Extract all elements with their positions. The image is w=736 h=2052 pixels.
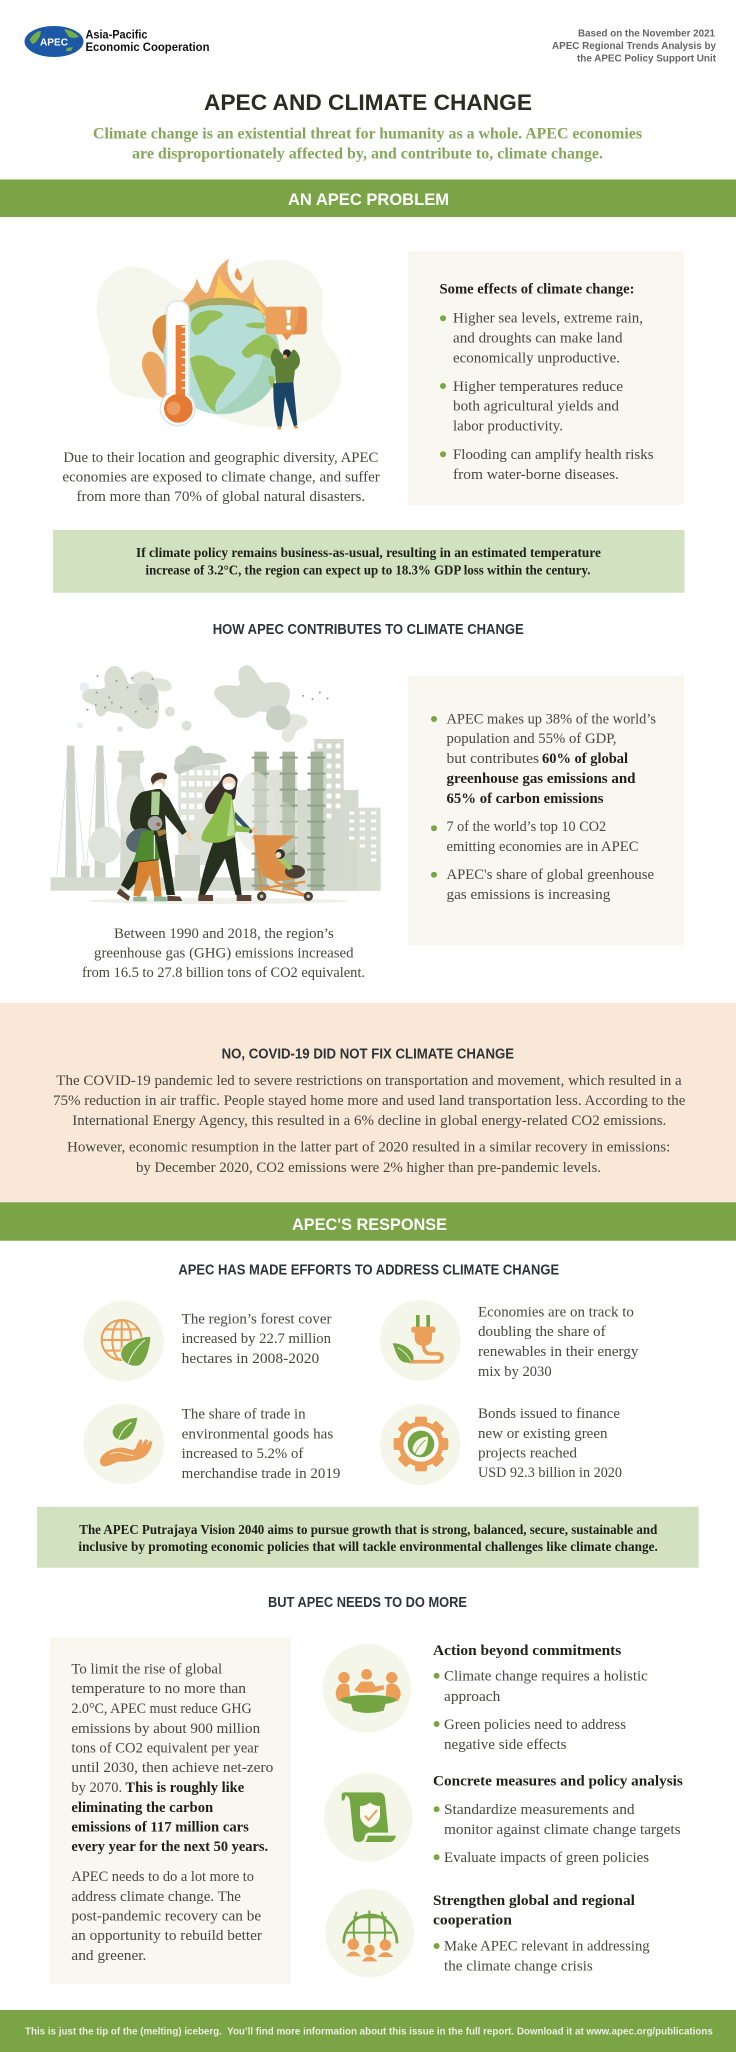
panel: emissions reduction needed: by 2070. (71, 1780, 122, 1796)
panel: effects of climate change: Some effects of climate change: (440, 282, 634, 298)
icon: globe and leaf (83, 1301, 164, 1381)
panel: emissions reduction needed: post-pandemic recovery can be (71, 1908, 261, 1924)
figure: man (117, 773, 193, 901)
heading: efforts: APEC HAS MADE EFFORTS TO ADDRESS CLIMATE CHANGE (178, 1262, 559, 1278)
text: renewables: Economies are on track to (478, 1304, 634, 1320)
stroller with baby (254, 835, 313, 901)
panel: effects of climate change: and droughts can make land (453, 330, 623, 346)
panel: COVID-19 did not fix climate change: NO, COVID-19 DID NOT FIX CLIMATE CHANGE (222, 1046, 514, 1062)
panel: emissions reduction needed: To limit the rise of global (71, 1662, 222, 1678)
panel: emissions reduction needed: every year for the next 50 years. (71, 1839, 268, 1855)
text: GHG emissions increase: greenhouse gas (GHG) emissions increased (94, 946, 354, 962)
text: forest cover: The region’s forest cover (182, 1312, 332, 1328)
subtitle: Climate change is an existential threat for humanity as a whole. APEC economies (93, 126, 642, 142)
text: strengthen cooperation: the climate change crisis (444, 1958, 593, 1974)
text: forest cover: increased by 22.7 million (182, 1331, 332, 1347)
text: green bonds (478, 1406, 622, 1481)
panel: effects of climate change: from water-borne diseases. (453, 467, 619, 483)
section band: APEC's response: APEC'S RESPONSE (292, 1215, 447, 1234)
source note (552, 28, 716, 64)
text: environmental goods: The share of trade in (182, 1406, 306, 1422)
icon: people around table (323, 1644, 411, 1733)
logo: APEC: APEC (40, 38, 68, 48)
text: concrete measures (433, 1774, 683, 1866)
icon: gear and leaf (380, 1404, 461, 1485)
panel: APEC contribution facts: but contributes (446, 751, 539, 767)
text: GHG emissions increase (82, 926, 365, 981)
footer band (0, 2010, 736, 2052)
panel: APEC contribution facts: 7 of the world’s top 10 CO2 (446, 819, 606, 835)
text: exposure to disasters: from more than 70% of global natural disasters. (76, 489, 365, 505)
title: APEC AND CLIMATE CHANGE (204, 90, 532, 115)
logo: APEC: Asia-Pacific (86, 30, 148, 42)
text: renewables: doubling the share of (478, 1324, 606, 1340)
text: strengthen cooperation: Make APEC relevant in addressing (444, 1938, 650, 1954)
logo: APEC: Economic Cooperation (86, 42, 210, 54)
icon: plug and leaf (380, 1300, 461, 1381)
text: environmental goods: environmental goods has (182, 1426, 334, 1442)
text: action beyond commitments: approach (444, 1689, 501, 1705)
text: green bonds: new or existing green (478, 1426, 608, 1442)
panel: APEC contribution facts: greenhouse gas emissions and (446, 771, 636, 787)
text: forest cover (182, 1312, 332, 1367)
panel: emissions reduction needed: 2.0°C, APEC must reduce GHG (71, 1701, 252, 1717)
callout: Putrajaya Vision 2040: inclusive by promoting economic policies that will tackle environmental challenges like climate change. (78, 1539, 658, 1554)
subtitle: are disproportionately affected by, and contribute to, climate change. (132, 146, 603, 162)
callout: GDP loss (53, 530, 684, 593)
panel: COVID-19 did not fix climate change: 75% reduction in air traffic. People stayed home more and used land transportation less. According to the (53, 1093, 685, 1109)
text: green bonds: USD 92.3 billion in 2020 (478, 1465, 622, 1481)
panel: APEC contribution facts: gas emissions is increasing (446, 887, 610, 903)
text: GHG emissions increase: Between 1990 and 2018, the region’s (114, 926, 334, 942)
section band: APEC's response (0, 1202, 736, 1241)
illustration: family walking in polluted city (51, 665, 381, 904)
text: renewables: mix by 2030 (478, 1364, 552, 1380)
panel: effects of climate change: Higher temperatures reduce (453, 379, 623, 395)
text: environmental goods (182, 1406, 340, 1482)
text: action beyond commitments (433, 1643, 648, 1753)
panel: emissions reduction needed: and greener. (71, 1948, 146, 1964)
icon: alert bubble (266, 307, 307, 340)
text: exposure to disasters: Due to their location and geographic diversity, APEC (63, 450, 378, 466)
panel: emissions reduction needed: an opportunity to rebuild better (71, 1928, 262, 1944)
source note: Based on the November 2021 (578, 28, 715, 40)
text: renewables: renewables in their energy (478, 1344, 639, 1360)
callout: Putrajaya Vision 2040 (37, 1507, 699, 1568)
panel: effects of climate change: labor productivity. (453, 418, 563, 434)
text: green bonds: projects reached (478, 1446, 578, 1462)
text: concrete measures: Standardize measurements and (444, 1802, 635, 1818)
panel: APEC contribution facts: 65% of carbon emissions (446, 791, 604, 807)
panel: emissions reduction needed: This is roughly like (125, 1780, 245, 1796)
panel: APEC contribution facts: APEC's share of global greenhouse (446, 867, 654, 883)
text: strengthen cooperation (433, 1893, 650, 1974)
text: concrete measures: monitor against climate change targets (444, 1822, 681, 1838)
panel: emissions reduction needed: eliminating the carbon (71, 1800, 213, 1816)
callout: GDP loss: If climate policy remains business-as-usual, resulting in an estimated temperature (136, 545, 601, 560)
heading: how APEC contributes: HOW APEC CONTRIBUTES TO CLIMATE CHANGE (213, 622, 524, 638)
panel: emissions reduction needed: emissions by about 900 million (71, 1721, 261, 1737)
panel: effects of climate change: Higher sea levels, extreme rain, (453, 311, 643, 327)
icon: hand and leaf (83, 1404, 164, 1484)
text: forest cover: hectares in 2008-2020 (182, 1351, 319, 1367)
panel: effects of climate change: economically unproductive. (453, 350, 620, 366)
panel: COVID-19 did not fix climate change: International Energy Agency, this resulted in a 6% decline in global energy-related CO2 emissions. (72, 1113, 666, 1129)
text: GHG emissions increase: from 16.5 to 27.8 billion tons of CO2 equivalent. (82, 965, 365, 981)
callout: GDP loss: increase of 3.2°C, the region can expect up to 18.3% GDP loss within the century. (146, 562, 590, 578)
panel: emissions reduction needed: address climate change. The (71, 1889, 241, 1905)
section band: an APEC problem: AN APEC PROBLEM (288, 190, 449, 209)
callout: Putrajaya Vision 2040: The APEC Putrajaya Vision 2040 aims to pursue growth that is strong, balanced, secure, sustainable and (79, 1522, 658, 1537)
panel: effects of climate change (408, 251, 684, 505)
panel: COVID-19 did not fix climate change: by December 2020, CO2 emissions were 2% higher than pre-pandemic levels. (136, 1160, 601, 1176)
figure: worried person (271, 348, 300, 429)
panel: emissions reduction needed: emissions of 117 million cars (71, 1820, 249, 1836)
panel: emissions reduction needed: until 2030, then achieve net-zero (71, 1760, 273, 1776)
logo: APEC (24, 26, 210, 57)
text: action beyond commitments: negative side effects (444, 1737, 567, 1753)
panel: effects of climate change: Flooding can amplify health risks (453, 447, 654, 463)
panel: APEC contribution facts: APEC makes up 38% of the world’s (446, 712, 656, 728)
panel: effects of climate change: both agricultural yields and (453, 398, 620, 414)
icon: scroll with shield (324, 1773, 413, 1862)
text: strengthen cooperation: cooperation (433, 1913, 512, 1929)
smoke clouds (77, 665, 328, 742)
figure: child with gas mask (122, 816, 167, 901)
panel: APEC contribution facts: population and 55% of GDP, (446, 731, 616, 747)
text: exposure to disasters: economies are exposed to climate change, and suffer (62, 470, 380, 486)
text: action beyond commitments: Action beyond commitments (433, 1643, 622, 1659)
panel: APEC contribution facts: 60% of global (542, 751, 628, 767)
text: exposure to disasters (62, 450, 380, 505)
illustration: burning globe with thermometer (96, 258, 341, 429)
panel: APEC contribution facts: emitting economies are in APEC (446, 839, 638, 855)
text: environmental goods: increased to 5.2% of (182, 1446, 303, 1462)
subtitle (93, 126, 642, 162)
text: concrete measures: Concrete measures and policy analysis (433, 1774, 683, 1790)
text: action beyond commitments: Climate change requires a holistic (444, 1668, 648, 1684)
icon: thermometer (160, 301, 195, 426)
text: action beyond commitments: Green policies need to address (444, 1717, 626, 1733)
section band: an APEC problem (0, 180, 736, 217)
text: environmental goods: merchandise trade in 2019 (182, 1466, 340, 1482)
panel: emissions reduction needed: APEC needs to do a lot more to (71, 1869, 254, 1885)
panel: COVID-19 did not fix climate change (0, 1003, 736, 1202)
panel: APEC contribution facts (408, 676, 684, 945)
figure: woman (198, 774, 258, 901)
smokestacks (252, 752, 325, 891)
panel: COVID-19 did not fix climate change: However, economic resumption in the latter part of 2020 resulted in a similar recovery in emissions: (67, 1140, 670, 1156)
panel: COVID-19 did not fix climate change: The COVID-19 pandemic led to severe restrictions on transportation and movement, which resulted in a (56, 1073, 682, 1089)
text: strengthen cooperation: Strengthen global and regional (433, 1893, 635, 1909)
source note: APEC Regional Trends Analysis by (552, 40, 716, 52)
heading: do more: BUT APEC NEEDS TO DO MORE (268, 1595, 467, 1611)
source note: the APEC Policy Support Unit (577, 52, 716, 64)
text: green bonds: Bonds issued to finance (478, 1406, 620, 1422)
text: concrete measures: Evaluate impacts of green policies (444, 1850, 649, 1866)
panel: emissions reduction needed: temperature to no more than (71, 1681, 247, 1697)
panel: emissions reduction needed: tons of CO2 equivalent per year (71, 1740, 259, 1756)
panel: emissions reduction needed (50, 1637, 291, 1984)
icon: globe with people (325, 1889, 414, 1977)
text: renewables (478, 1304, 639, 1380)
